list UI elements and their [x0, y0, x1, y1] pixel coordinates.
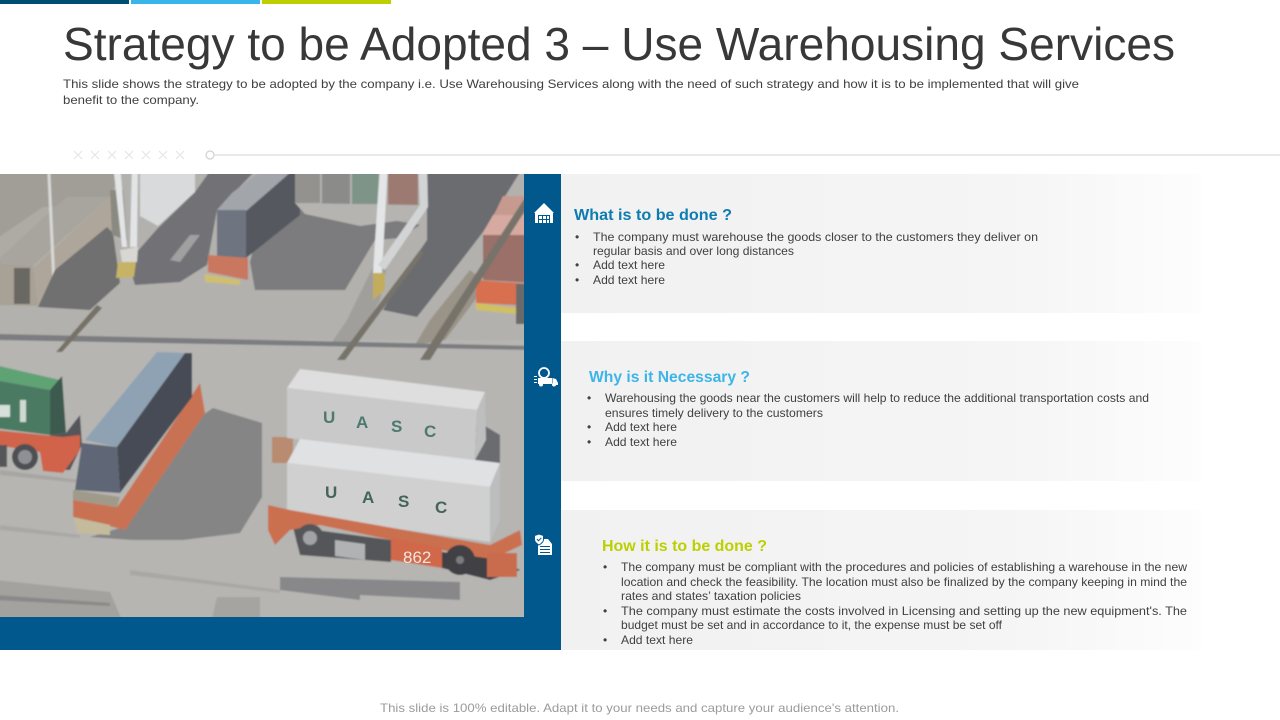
bullet list: Add text here: [593, 273, 665, 287]
bullet list: Add text here: [605, 420, 677, 434]
bullet list: [603, 560, 1187, 647]
bullet list: The company must estimate the costs involved in Licensing and setting up the new equipment's. The: [621, 604, 1187, 618]
lower ground: [0, 340, 534, 627]
big shadow: [90, 408, 262, 540]
heading: Why is it Necessary ?: [589, 369, 750, 386]
bullet list: •: [587, 420, 591, 434]
panel: why is it necessary: [561, 341, 1201, 481]
bullet list: •: [575, 230, 579, 244]
bullet list: •: [575, 258, 579, 272]
green container: [0, 365, 60, 390]
bullet list: Add text here: [593, 258, 665, 272]
footer note: This slide is 100% editable. Adapt it to your needs and capture your audience's attention.: [380, 701, 899, 715]
bullet list: budget must be set and in accordance to it, the expense must be set off: [621, 618, 1003, 632]
bullet list: Add text here: [621, 633, 693, 647]
top colour tabs: [0, 0, 391, 4]
blue L-shaped frame: [0, 174, 561, 650]
right dark road: [383, 164, 525, 317]
container lettering: U: [323, 408, 335, 427]
bullet list: Add text here: [605, 435, 677, 449]
container lettering: S: [398, 492, 409, 511]
bullet list: •: [603, 633, 607, 647]
container lettering: U: [325, 483, 337, 502]
bullet list: •: [587, 391, 591, 405]
container lettering: C: [424, 422, 436, 441]
red container right: [482, 234, 524, 284]
heading: How it is to be done ?: [602, 538, 767, 555]
container lettering: [323, 408, 447, 567]
container lettering: A: [356, 413, 368, 432]
description text: benefit to the company.: [63, 93, 199, 107]
bullet list: The company must be compliant with the procedures and policies of establishing a warehouse in the new: [621, 560, 1187, 574]
shadow centre: [250, 203, 420, 290]
title: Strategy to be Adopted 3 – Use Warehousing Services: [63, 18, 1175, 70]
description text: This slide shows the strategy to be adopted by the company i.e. Use Warehousing Services along with the need of such strategy and how it is to be implemented that will give: [63, 77, 1079, 91]
description text: [63, 77, 1079, 107]
bullet list: •: [603, 560, 607, 574]
panel: how it is to be done: [561, 510, 1201, 650]
panel: what is to be done: [561, 174, 1201, 313]
bullet list: The company must warehouse the goods closer to the customers they deliver on: [593, 230, 1038, 244]
bullet list: •: [587, 435, 591, 449]
container lettering: S: [391, 417, 402, 436]
container lettering: C: [435, 498, 447, 517]
horizontal shadows and rails: [0, 334, 534, 350]
crane right: [373, 164, 388, 273]
container row top: [294, 174, 320, 204]
bullet list: regular basis and over long distances: [593, 244, 794, 258]
photo: container yard: [0, 164, 535, 627]
dark container: [73, 383, 205, 530]
dark road upper centre: [132, 174, 253, 286]
bullet list: ensures timely delivery to the customers: [605, 406, 823, 420]
icon: delivery truck with stopwatch: [534, 368, 558, 386]
dark container top centre: [218, 174, 288, 210]
container lettering: 862: [403, 548, 431, 567]
chassis: [293, 527, 391, 562]
bullet list: location and check the feasibility. The location must also be finalized by the company keeping in mind the: [621, 575, 1187, 589]
top-left yard and warehouse: [0, 174, 115, 236]
container lettering: A: [362, 488, 374, 507]
containers UASC: [272, 437, 293, 463]
decorative divider with crosses: [74, 151, 1280, 159]
bullet list: [575, 230, 1038, 287]
bullet list: [587, 391, 1149, 449]
white box and crane left: [110, 190, 127, 240]
heading: What is to be done ?: [574, 207, 732, 224]
bullet list: Warehousing the goods near the customers will help to reduce the additional transportation costs and: [605, 391, 1149, 405]
bullet list: •: [603, 604, 607, 618]
icon: warehouse: [534, 203, 554, 223]
icon: shield and checklist: [534, 534, 552, 555]
bullet list: rates and states’ taxation policies: [621, 589, 801, 603]
bullet list: •: [575, 273, 579, 287]
